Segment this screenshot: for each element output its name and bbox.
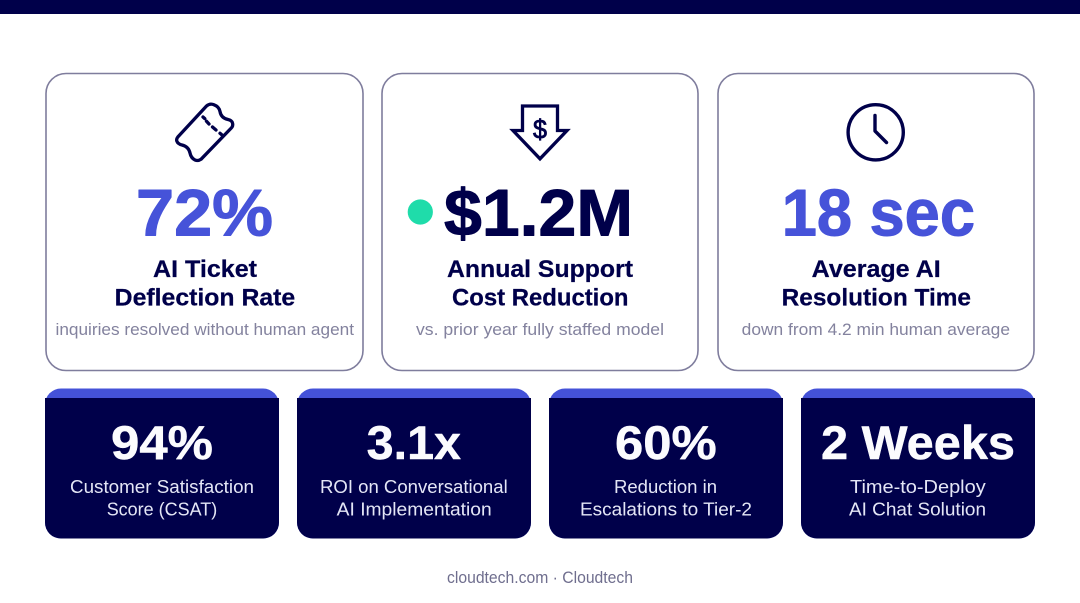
accent dot <box>408 199 433 225</box>
metric: $1.2M: $1.2M <box>444 176 633 250</box>
footer: cloudtech.com · Cloudtech <box>447 569 633 587</box>
label: Customer Satisfaction Score: Customer Satisfaction <box>70 476 254 497</box>
icon: ticket <box>177 104 233 161</box>
label: Annual Support Cost Reduction: Annual Support <box>447 256 633 283</box>
label: Reduction in Escalations to Tier-2: Reduction in <box>614 476 717 497</box>
panel: ROI <box>297 388 531 538</box>
label: AI Ticket Deflection Rate <box>115 256 295 312</box>
metric: 2 Weeks: 2 Weeks <box>821 416 1015 469</box>
panel: escalation reduction <box>549 388 783 538</box>
label: Time-to-Deploy AI Chat Solution: AI Chat Solution <box>849 499 986 520</box>
panel: average AI resolution time <box>718 74 1034 370</box>
metric: 60%: 60% <box>615 416 717 469</box>
label: Time-to-Deploy AI Chat Solution: Time-to-Deploy <box>850 476 987 497</box>
top bar <box>0 0 1080 14</box>
label: Average AI Resolution Time: Average AI <box>812 256 941 283</box>
note: down from 4.2 min: down from 4.2 min human average <box>742 320 1010 339</box>
label: Customer Satisfaction Score <box>70 476 254 520</box>
label: ROI on Conversational AI Implementation: ROI on Conversational <box>320 476 508 497</box>
label: Reduction in Escalations to Tier-2: Escalations to Tier-2 <box>580 499 752 520</box>
label: Annual Support Cost Reduction: Cost Reduction <box>452 285 628 312</box>
note: vs prior year: vs. prior year fully staffed model <box>416 320 664 339</box>
metric: 3.1x: 3.1x <box>367 416 461 469</box>
label: Average AI Resolution Time: Resolution Time <box>782 285 971 312</box>
label: Time-to-Deploy AI Chat Solution <box>849 476 987 520</box>
label: ROI on Conversational AI Implementation <box>320 476 508 520</box>
panel: annual support cost reduction <box>382 74 698 370</box>
metric: 18 sec: 18 sec <box>782 176 975 250</box>
icon: dollar down arrow <box>513 106 567 159</box>
metric: 94%: 94% <box>111 416 213 469</box>
panel: time to deploy <box>801 388 1035 538</box>
icon: dollar down arrow: $ <box>533 114 547 144</box>
label: Reduction in Escalations to Tier-2 <box>580 476 752 520</box>
label: Annual Support Cost Reduction <box>447 256 633 312</box>
label: Customer Satisfaction Score: Score (CSAT) <box>107 499 217 520</box>
note: inquiries resolved: inquiries resolved without human agent <box>56 320 354 339</box>
icon: clock <box>848 105 903 160</box>
panel: AI ticket deflection rate <box>46 74 363 370</box>
metric: 72%: 72% <box>136 176 273 250</box>
label: Average AI Resolution Time <box>782 256 971 312</box>
panel: customer satisfaction <box>45 388 279 538</box>
label: ROI on Conversational AI Implementation: AI Implementation <box>337 499 492 520</box>
label: AI Ticket Deflection Rate: Deflection Rate <box>115 285 295 312</box>
label: AI Ticket Deflection Rate: AI Ticket <box>153 256 257 283</box>
